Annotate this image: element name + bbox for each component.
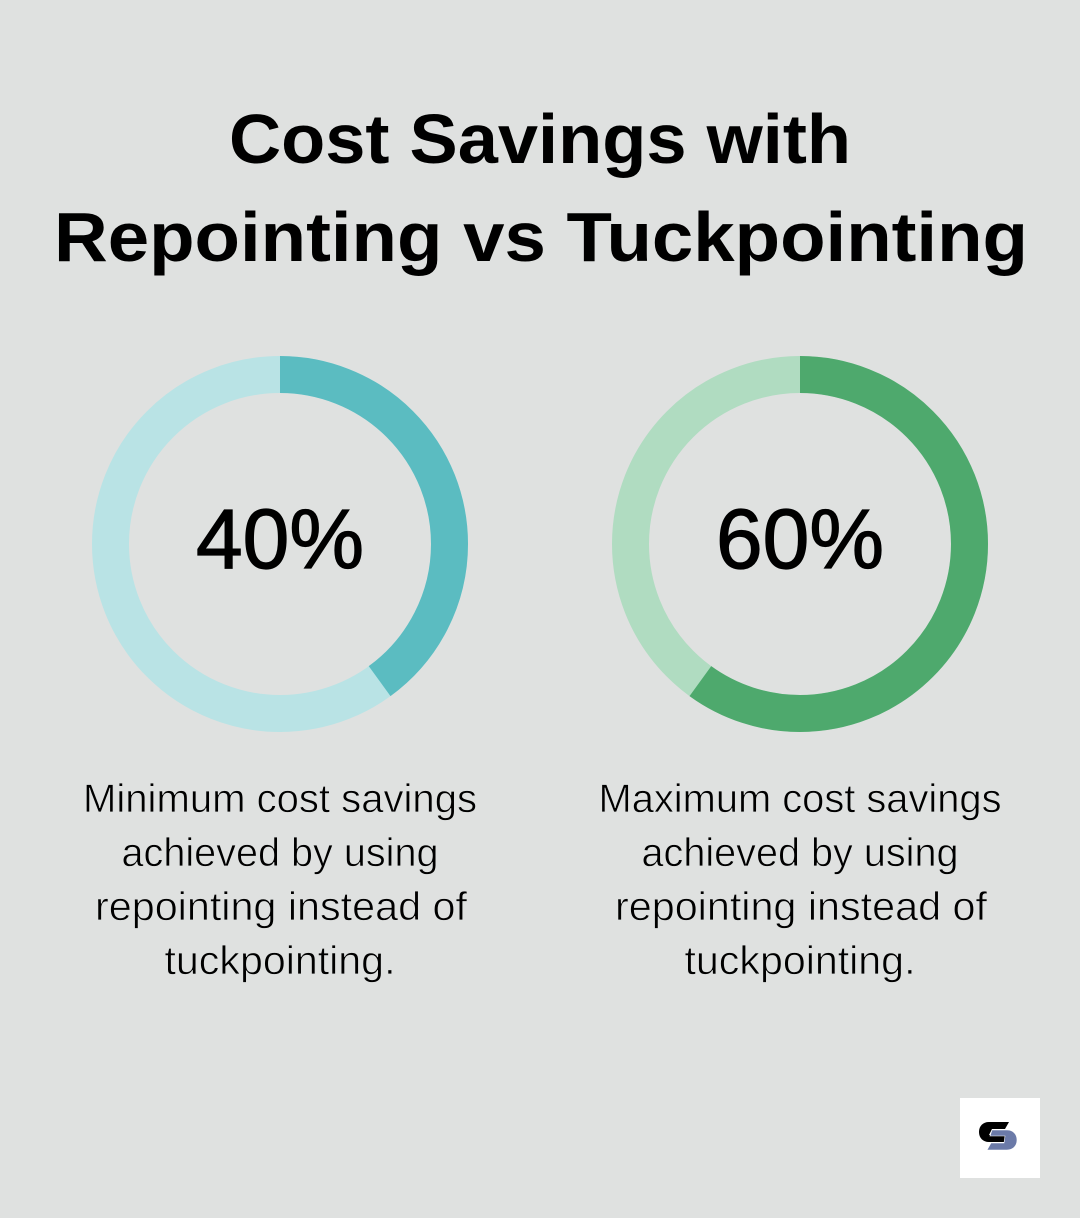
title: Repointing vs Tuckpointing: [54, 198, 1028, 276]
donut chart: 60%: [630, 374, 970, 714]
description: minimum: repointing instead of: [95, 885, 468, 929]
panel: minimum savings: [83, 374, 477, 983]
description: maximum: tuckpointing.: [684, 939, 916, 983]
value: 60%: 60%: [716, 492, 884, 586]
description: maximum: [598, 777, 1002, 983]
icon: logo badge: [960, 1098, 1040, 1178]
description: maximum: Maximum cost savings: [598, 777, 1002, 821]
description: minimum: Minimum cost savings: [83, 777, 477, 821]
value: 40%: 40%: [196, 492, 364, 586]
description: minimum: achieved by using: [122, 831, 438, 875]
description: maximum: achieved by using: [642, 831, 958, 875]
panel: maximum savings: [598, 374, 1002, 983]
title: Cost Savings with: [229, 100, 851, 178]
description: minimum: [83, 777, 477, 983]
description: minimum: tuckpointing.: [164, 939, 396, 983]
description: maximum: repointing instead of: [615, 885, 988, 929]
donut chart: 40%: [110, 374, 450, 714]
title: [54, 100, 1028, 276]
